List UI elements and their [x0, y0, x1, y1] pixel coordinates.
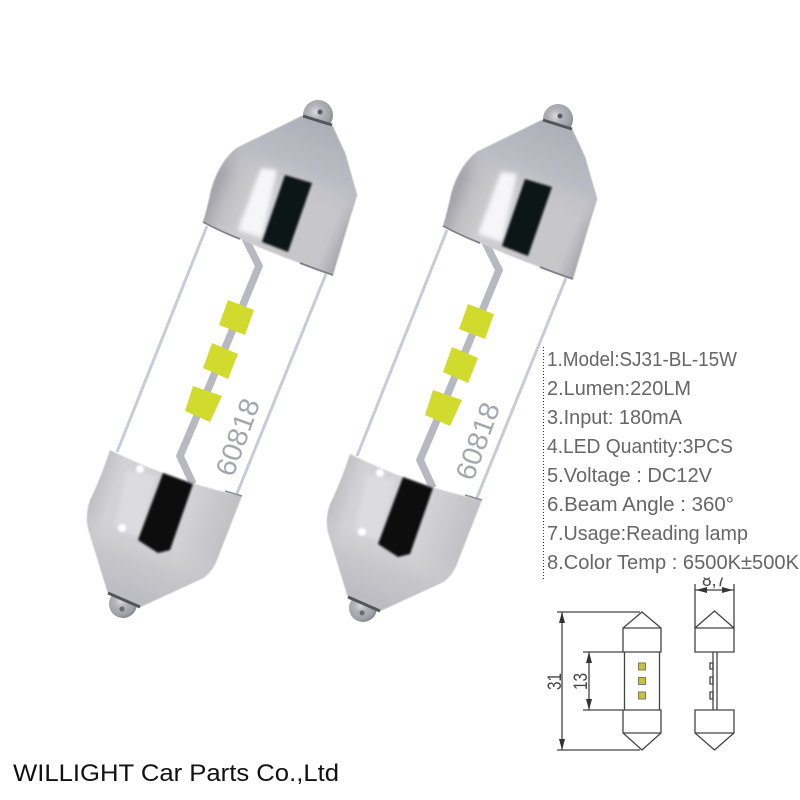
top nub	[303, 100, 333, 130]
bottom nub	[109, 590, 137, 618]
bottom nub	[349, 594, 377, 622]
glass tube	[357, 230, 566, 500]
specification list: 5.Voltage : DC12V	[547, 465, 713, 487]
dimension drawing: front view	[545, 612, 661, 750]
width arrows	[696, 587, 733, 593]
specification list	[547, 349, 800, 574]
specification list: 3.Input: 180mA	[547, 407, 683, 429]
dimension labels: 31	[545, 673, 566, 690]
specification list: 1.Model:SJ31-BL-15W	[547, 349, 737, 371]
dimension arrows	[559, 612, 592, 750]
dimension labels	[545, 673, 592, 690]
LED chips	[185, 300, 254, 422]
specification list: 2.Lumen:220LM	[547, 378, 691, 400]
specification list: 6.Beam Angle : 360°	[547, 494, 734, 516]
dimension labels: 13	[571, 673, 592, 690]
board code: 60818	[210, 394, 266, 480]
bottom metal cap	[87, 450, 242, 607]
top nub	[543, 104, 573, 134]
circuit trace	[180, 238, 259, 484]
bottom metal cap	[327, 454, 482, 611]
specification list: 7.Usage:Reading lamp	[547, 523, 748, 545]
bulb: right	[327, 104, 597, 622]
board code: 60818	[450, 398, 506, 484]
LED chips	[425, 304, 494, 426]
bulb: left	[87, 100, 357, 618]
glass tube	[117, 226, 326, 496]
top metal cap	[203, 116, 357, 275]
width label: 8,7	[702, 570, 726, 590]
top metal cap	[443, 120, 597, 279]
circuit trace	[420, 242, 499, 488]
specification list: 4.LED Quantity:3PCS	[547, 436, 733, 458]
dimension drawing: side view	[695, 570, 734, 750]
diagram LEDs	[638, 663, 646, 699]
company name: WILLIGHT Car Parts Co.,Ltd	[13, 760, 339, 787]
specification list: 8.Color Temp : 6500K±500K	[547, 552, 800, 574]
